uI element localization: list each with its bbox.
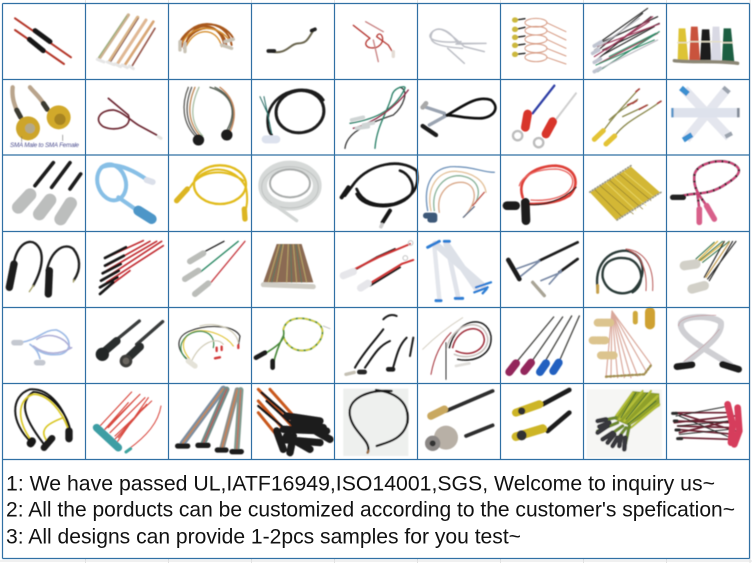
photo: yellow spade wires (594, 89, 661, 144)
photo: waterproof black cables (9, 242, 79, 294)
photo: black cable on grey background (343, 389, 408, 456)
photo: rainbow small-wire bundle (263, 244, 313, 287)
photo: multicolor wire bundle with connectors (593, 8, 659, 72)
notes text block (6, 472, 735, 548)
photo: arched brown wire bundle (180, 24, 233, 52)
note line 2: 2: All the porducts can be customized according to the customer's spefication~ (6, 498, 735, 522)
photo: white connectors with multicolor wires (684, 241, 736, 289)
photo: black and yellow PCIe power cables (15, 389, 70, 448)
photo: blue flat console cable (93, 161, 153, 219)
caption: SMA Male to SMA Female: SMA Male to SMA Female (10, 142, 80, 149)
photo: dark coiled cable with gold tip (597, 249, 653, 293)
photo: black waterproof connector pair (96, 321, 163, 367)
product photo grid (9, 8, 740, 458)
photo: SMA male and female connectors (12, 87, 71, 142)
photo: mixed wire harness with red terminals (179, 325, 240, 366)
photo: Fakra antenna cables (509, 316, 579, 372)
photo: multicolor wires with grey connector (426, 167, 494, 220)
photo: green and yellow twisted wires (256, 318, 330, 368)
photo: flat striped ribbon cables (97, 15, 155, 69)
photo: yellow network cable (177, 165, 247, 219)
photo: black cables with small connectors (346, 315, 413, 374)
photo: inline connector wires (15, 18, 71, 64)
photo: red, black and white wire coil (423, 318, 491, 379)
photo: grey ribbon cable with IDC connectors (677, 315, 739, 369)
photo: white and blue wire loop (14, 330, 72, 363)
photo: red looped wire with connector (353, 22, 393, 62)
photo: red and black wires with pink terminals (673, 404, 739, 444)
photo: harness with black connectors (184, 87, 234, 140)
photo: small twisted cable (268, 29, 315, 52)
photo: gold terminal wire bundle (589, 166, 661, 221)
photo: gold IPEX connectors (516, 390, 569, 440)
photo: red and black wires with white connectors (343, 241, 413, 288)
photo: orange and black jumper wires (258, 389, 330, 453)
photo: red and black cable with connectors (507, 166, 576, 221)
photo: black network cable (342, 164, 417, 227)
photo: red and black twisted wire loop (99, 98, 161, 138)
note line 1: 1: We have passed UL,IATF16949,ISO14001,SGS, Welcome to inquiry us~ (6, 472, 715, 496)
photo: five colored wire bundles (674, 27, 738, 63)
photo: red ring terminals (513, 86, 576, 147)
photo: green-yellow bundle with black terminals (587, 389, 662, 458)
note line 3: 3: All designs can provide 1-2pcs samples for you test~ (6, 526, 521, 548)
photo: SMA and BNC bulkhead connectors (425, 391, 493, 451)
photo: red wires with teal terminals (97, 392, 161, 452)
photo: LVDS black cable with connector (423, 99, 495, 135)
photo: salmon coaxial bundle with gold parts (593, 311, 651, 378)
photo: pink and black twisted pair (673, 161, 739, 222)
photo: wires with clear spade terminals (185, 241, 245, 294)
photo: white flat cable coil (262, 165, 318, 221)
photo: black cables with clear spade plugs (18, 163, 81, 219)
photo: LVDS cables (508, 242, 578, 296)
photo: red wires with black terminals (100, 241, 163, 294)
photo: gold connectors with salmon loops (515, 18, 566, 64)
photo: multicolor wire harness (345, 87, 408, 148)
photo: flexible flat cables with blue tips (428, 241, 491, 301)
photo: rainbow ribbon cables (178, 389, 241, 452)
photo: grey thin wires (430, 29, 486, 63)
photo: flat flexible cables in X (671, 87, 740, 140)
photo: black coiled cable (260, 87, 327, 139)
